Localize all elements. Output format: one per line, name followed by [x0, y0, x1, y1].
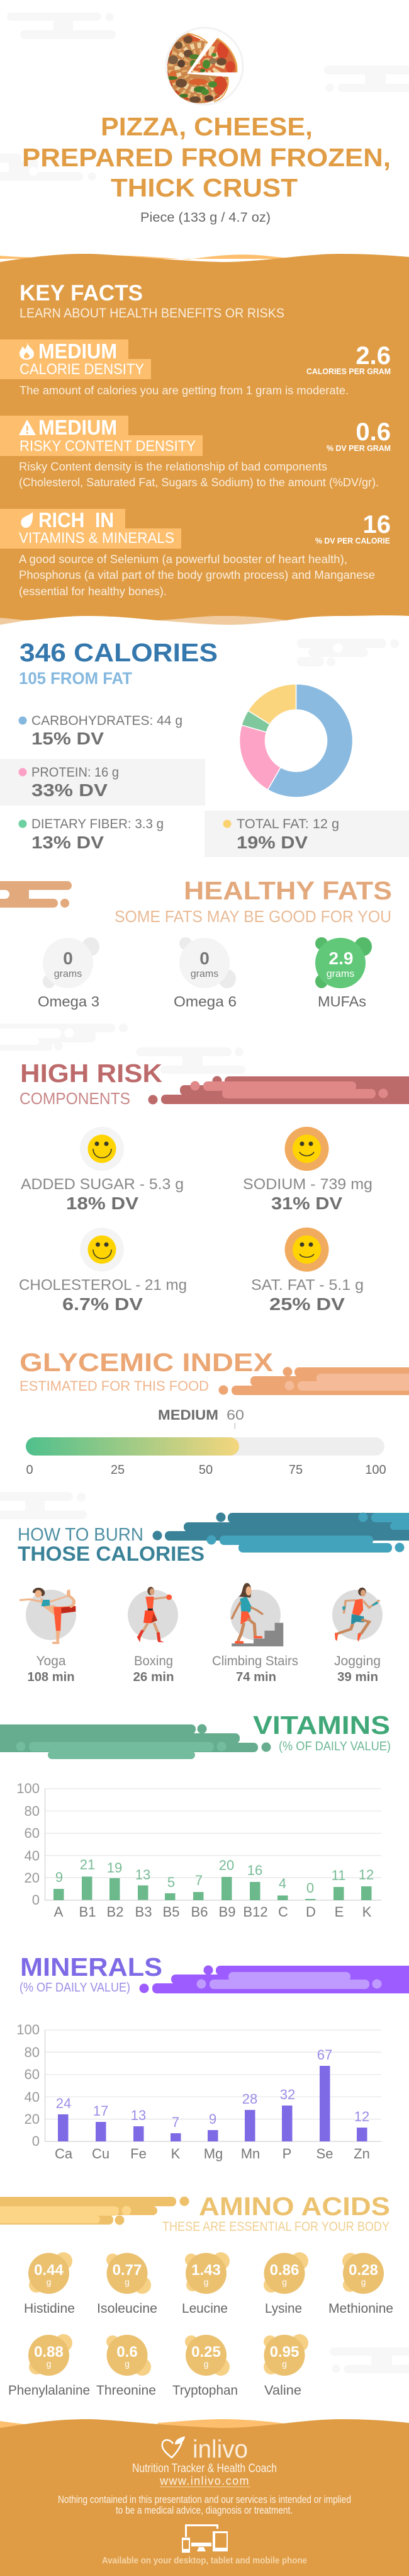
decorative header band — [0, 1724, 271, 1759]
amino: threonine: g — [125, 2359, 130, 2369]
availability note: Available on your desktop, tablet and mobile phone — [102, 2555, 307, 2566]
fact: risky content density: Risky Content density is the relationship of bad components — [19, 460, 327, 473]
decorative header band — [219, 1367, 409, 1395]
bar chart: minerals: Mg — [204, 2146, 223, 2162]
website link: www.inlivo.com — [159, 2475, 250, 2487]
bar chart: vitamins: B2 — [107, 1904, 123, 1920]
activity: jogging — [332, 1588, 383, 1684]
logo: inlivo: inlivo — [193, 2436, 248, 2463]
icon: devices — [182, 2524, 228, 2553]
amino: histidine: g — [47, 2277, 51, 2287]
amino: leucine: g — [204, 2277, 208, 2287]
item: saturated fat: SAT. FAT - 5.1 g — [251, 1277, 364, 1294]
amino: isoleucine — [97, 2253, 157, 2316]
activity: yoga: 108 min — [28, 1670, 74, 1684]
legend: total fat — [204, 811, 409, 857]
amino: leucine: Leucine — [182, 2301, 228, 2316]
vitamins heading: VITAMINS — [253, 1711, 390, 1740]
gauge scale: 100 — [365, 1463, 386, 1477]
tagline: Nutrition Tracker & Health Coach — [132, 2462, 277, 2475]
omega 3 bubble: grams — [54, 969, 82, 979]
bar chart: minerals: Zn — [354, 2146, 370, 2162]
legend: dietary fiber: 13% DV — [31, 833, 104, 852]
bar chart: vitamins: C — [278, 1904, 288, 1920]
bar chart: vitamins: 13 — [135, 1867, 150, 1883]
key facts heading: KEY FACTS — [20, 281, 143, 305]
legend: protein — [0, 759, 205, 806]
decorative header band — [152, 1513, 409, 1553]
fact: calorie density: CALORIES PER GRAM — [306, 367, 391, 376]
activity: boxing: Boxing — [134, 1654, 173, 1668]
bar chart: minerals: 12 — [354, 2109, 369, 2124]
bar chart: minerals: K — [171, 2146, 181, 2162]
amino: leucine: 1.43 — [191, 2262, 221, 2279]
bar chart: vitamins: B3 — [135, 1904, 152, 1920]
activity: jogging: Jogging — [334, 1654, 381, 1668]
fact: calorie density: 2.6 — [356, 342, 391, 370]
bar chart: vitamins: 12 — [359, 1867, 374, 1883]
legend: dietary fiber: DIETARY FIBER: 3.3 g — [31, 817, 164, 831]
calories heading: 346 CALORIES — [20, 638, 218, 667]
legend: carbohydrates: 15% DV — [31, 729, 104, 748]
amino acids heading: AMINO ACIDS — [199, 2192, 390, 2221]
fact: rich in vitamins and minerals: % DV PER CALORIE — [315, 536, 390, 545]
legend: dietary fiber — [19, 817, 164, 852]
item: cholesterol: CHOLESTEROL - 21 mg — [19, 1277, 187, 1294]
legend: protein: 33% DV — [31, 780, 108, 800]
amino: phenylalanine: 0.88 — [34, 2344, 64, 2361]
bar chart: vitamins: 60 — [25, 1825, 40, 1841]
fact: calorie density — [0, 339, 391, 397]
value label — [158, 1407, 244, 1429]
decorative header band — [0, 2197, 189, 2225]
healthy fats subheading: SOME FATS MAY BE GOOD FOR YOU — [115, 907, 391, 926]
omega 3 bubble: 0 — [63, 949, 73, 968]
bar chart: vitamins: 4 — [279, 1876, 286, 1891]
MUFAs bubble: grams — [327, 969, 354, 979]
activity: boxing — [128, 1587, 178, 1684]
bar chart: vitamins: 7 — [195, 1872, 203, 1888]
fact: calorie density: The amount of calories you are getting from 1 gram is moderate. — [20, 384, 349, 397]
activity: climbing stairs: 74 min — [236, 1670, 276, 1684]
amino: tryptophan: 0.25 — [191, 2344, 221, 2361]
glycemic index heading: GLYCEMIC INDEX — [20, 1348, 273, 1377]
amino: histidine: 0.44 — [34, 2262, 64, 2279]
bar chart: vitamins: E — [335, 1904, 344, 1920]
bar chart: minerals: Fe — [130, 2146, 147, 2162]
omega 6 bubble: grams — [191, 969, 218, 979]
gauge scale: 75 — [289, 1463, 303, 1477]
amino: phenylalanine: g — [47, 2359, 51, 2369]
bar chart: vitamins: D — [306, 1904, 316, 1920]
activity: boxing: 26 min — [133, 1670, 174, 1684]
amino: lysine: g — [282, 2277, 287, 2287]
omega 6 bubble — [174, 937, 237, 1010]
logo: inlivo — [162, 2436, 248, 2463]
fact: risky content density: RISKY CONTENT DENSITY — [20, 438, 196, 455]
fact: rich in vitamins and minerals — [0, 508, 391, 598]
title: PIZZA, CHEESE, — [101, 112, 313, 141]
amino: methionine: Methionine — [328, 2301, 393, 2316]
item: saturated fat — [251, 1228, 364, 1314]
gauge scale: 50 — [199, 1463, 213, 1477]
panel: footer — [0, 2419, 409, 2576]
bar chart: vitamins: B1 — [79, 1904, 96, 1920]
item: sodium — [243, 1127, 373, 1213]
bar chart: minerals: 9 — [209, 2111, 216, 2127]
fact: rich in vitamins and minerals: VITAMINS & MINERALS — [19, 530, 174, 547]
bar chart: minerals: P — [283, 2146, 291, 2162]
bar chart: minerals: Se — [317, 2146, 333, 2162]
burn subheading: THOSE CALORIES — [18, 1542, 204, 1565]
bar chart: minerals — [16, 2022, 381, 2162]
amino: lysine — [264, 2252, 308, 2316]
decorative header band — [148, 1076, 409, 1105]
key facts subheading: LEARN ABOUT HEALTH BENEFITS OR RISKS — [20, 306, 284, 321]
bar chart: vitamins: 40 — [25, 1848, 40, 1864]
amino: phenylalanine — [8, 2334, 90, 2398]
panel: amino acids — [0, 2192, 393, 2398]
item: added sugar: ADDED SUGAR - 5.3 g — [21, 1176, 184, 1193]
item: added sugar — [21, 1127, 184, 1213]
MUFAs bubble: MUFAs — [318, 993, 366, 1010]
amino: isoleucine: g — [125, 2277, 130, 2287]
bar chart: vitamins: B5 — [163, 1904, 179, 1920]
activity: climbing stairs — [212, 1583, 298, 1684]
bar chart: minerals: Ca — [55, 2146, 73, 2162]
item: cholesterol — [19, 1228, 187, 1314]
fact: rich in vitamins and minerals: RICH IN — [38, 508, 114, 532]
icon: flame — [20, 342, 34, 360]
panel: key facts — [0, 254, 409, 625]
item: added sugar: 18% DV — [66, 1194, 138, 1213]
amino: valine: Valine — [264, 2383, 301, 2398]
burn heading: HOW TO BURN — [18, 1525, 143, 1545]
omega 6 bubble: Omega 6 — [174, 993, 237, 1010]
panel: calories — [0, 638, 409, 857]
bar chart: minerals: 7 — [172, 2114, 179, 2130]
item: sodium: SODIUM - 739 mg — [243, 1176, 373, 1193]
high risk subheading: COMPONENTS — [20, 1089, 130, 1108]
bar chart: minerals: 40 — [25, 2089, 40, 2105]
bar chart: minerals: 0 — [32, 2133, 40, 2149]
bar chart: minerals: 100 — [16, 2022, 40, 2037]
panel: healthy fats — [0, 876, 392, 1010]
glycemic index subheading: ESTIMATED FOR THIS FOOD — [20, 1378, 209, 1394]
omega 3 bubble — [38, 937, 99, 1010]
MUFAs bubble: 2.9 — [329, 949, 353, 968]
activity: yoga: Yoga — [36, 1654, 66, 1668]
amino: isoleucine: 0.77 — [113, 2262, 142, 2279]
legend: total fat: TOTAL FAT: 12 g — [237, 817, 339, 831]
item: sodium: 31% DV — [271, 1194, 342, 1213]
bar chart: vitamins: B12 — [243, 1904, 268, 1920]
serving size: Piece (133 g / 4.7 oz) — [140, 210, 271, 225]
bar chart: minerals: Mn — [241, 2146, 260, 2162]
icon: pizza on a plate — [166, 28, 243, 105]
omega 6 bubble: 0 — [199, 949, 210, 968]
bar chart: vitamins: 9 — [55, 1869, 63, 1885]
amino: lysine: Lysine — [265, 2301, 302, 2316]
gauge bar — [26, 1437, 384, 1456]
calories from fat: 105 FROM FAT — [19, 669, 132, 688]
legend: carbohydrates — [19, 714, 182, 748]
omega 3 bubble: Omega 3 — [38, 993, 99, 1010]
bar chart: minerals: 20 — [25, 2111, 40, 2127]
activity: yoga — [20, 1588, 76, 1684]
fact: risky content density: (Cholesterol, Saturated Fat, Sugars & Sodium) to the amount (%DV/gr). — [19, 476, 379, 489]
fact: rich in vitamins and minerals: 16 — [362, 511, 391, 539]
amino: leucine — [182, 2252, 230, 2316]
bar chart: vitamins: A — [54, 1904, 64, 1920]
amino: methionine — [328, 2253, 393, 2316]
disclaimer: to be a medical advice, diagnosis or treatment. — [116, 2504, 293, 2516]
amino: methionine: g — [361, 2277, 366, 2287]
bar chart: minerals: 80 — [25, 2044, 40, 2060]
fact: risky content density: MEDIUM — [38, 416, 117, 439]
fact: risky content density — [0, 416, 391, 489]
item: saturated fat: 25% DV — [269, 1294, 345, 1314]
amino: tryptophan: g — [204, 2359, 208, 2369]
bar chart: vitamins: K — [362, 1904, 372, 1920]
MUFAs bubble — [315, 937, 372, 1010]
bar chart: vitamins — [16, 1781, 381, 1920]
bar chart: vitamins: 19 — [107, 1860, 122, 1876]
fact: rich in vitamins and minerals: Phosphorus (a vital part of the body growth process) and Manganese — [19, 569, 375, 581]
title: PREPARED FROM FROZEN, — [22, 143, 391, 172]
bar chart: vitamins: 80 — [25, 1803, 40, 1819]
amino: histidine — [24, 2252, 75, 2316]
bar chart: vitamins: 5 — [167, 1874, 175, 1890]
amino: tryptophan — [172, 2335, 238, 2398]
bar chart: vitamins: 20 — [25, 1870, 40, 1886]
decorative header band — [0, 881, 72, 908]
bar chart: vitamins: 21 — [80, 1857, 95, 1872]
amino: threonine — [96, 2335, 156, 2398]
fact: risky content density: % DV PER GRAM — [327, 443, 391, 453]
bar chart: minerals: 32 — [280, 2087, 295, 2102]
activity: jogging: 39 min — [337, 1670, 378, 1684]
bar chart: minerals: 13 — [131, 2107, 146, 2123]
amino: phenylalanine: Phenylalanine — [8, 2383, 90, 2398]
gauge scale: 25 — [111, 1463, 125, 1477]
vitamins subheading: (% OF DAILY VALUE) — [279, 1740, 391, 1753]
legend: carbohydrates: CARBOHYDRATES: 44 g — [31, 714, 182, 728]
activity: climbing stairs: Climbing Stairs — [212, 1654, 298, 1668]
amino: threonine: Threonine — [96, 2383, 156, 2398]
legend: protein: PROTEIN: 16 g — [31, 765, 119, 780]
amino: valine: 0.95 — [270, 2344, 299, 2361]
title: THICK CRUST — [111, 173, 298, 202]
panel: how to burn those calories — [18, 1513, 409, 1684]
panel: vitamins — [0, 1711, 391, 1920]
fact: rich in vitamins and minerals: A good source of Selenium (a powerful booster of heart health), — [19, 553, 347, 566]
high risk heading: HIGH RISK — [20, 1059, 162, 1088]
fact: calorie density: MEDIUM — [38, 339, 117, 363]
amino: threonine: 0.6 — [116, 2344, 138, 2361]
healthy fats heading: HEALTHY FATS — [184, 876, 392, 905]
panel: glycemic index — [20, 1348, 409, 1477]
amino: valine: g — [282, 2359, 287, 2369]
bar chart: vitamins: 0 — [306, 1880, 314, 1896]
title — [22, 112, 391, 202]
amino: tryptophan: Tryptophan — [172, 2383, 238, 2398]
bar chart: minerals: 24 — [56, 2095, 71, 2111]
fact: risky content density: 0.6 — [356, 418, 391, 446]
icon: warning triangle — [19, 419, 36, 435]
decorative header band — [140, 1965, 409, 1993]
amino: lysine: 0.86 — [270, 2262, 299, 2279]
bar chart: vitamins: 0 — [32, 1892, 40, 1908]
amino: isoleucine: Isoleucine — [97, 2301, 157, 2316]
bar chart: vitamins: 20 — [219, 1857, 234, 1873]
legend: total fat: 19% DV — [237, 833, 308, 852]
amino: histidine: Histidine — [24, 2301, 75, 2316]
bar chart: vitamins: 100 — [16, 1781, 40, 1796]
panel: minerals — [16, 1952, 409, 2162]
white cut-outs in the clouds — [0, 167, 342, 1045]
panel: high risk components — [19, 1059, 409, 1314]
icon: leaf — [21, 512, 33, 528]
bar chart: vitamins: B9 — [219, 1904, 235, 1920]
bar chart: vitamins: B6 — [191, 1904, 208, 1920]
amino: valine — [264, 2334, 308, 2398]
fact: rich in vitamins and minerals: (essential for healthy bones). — [19, 585, 167, 598]
bar chart: minerals: 28 — [242, 2091, 257, 2107]
bar chart: minerals: 60 — [25, 2066, 40, 2082]
value label: MEDIUM — [158, 1407, 218, 1423]
amino: methionine: 0.28 — [349, 2262, 378, 2279]
bar chart: vitamins: 11 — [332, 1867, 345, 1883]
bar chart: vitamins: 16 — [247, 1862, 262, 1878]
disclaimer — [58, 2493, 351, 2516]
value label: 60 — [227, 1407, 244, 1423]
minerals heading: MINERALS — [20, 1952, 162, 1981]
bar chart: minerals: 67 — [317, 2047, 332, 2063]
item: cholesterol: 6.7% DV — [62, 1294, 143, 1314]
donut chart — [240, 684, 353, 797]
gauge scale — [26, 1463, 386, 1477]
bar chart: minerals: Cu — [92, 2146, 109, 2162]
gauge scale: 0 — [26, 1463, 33, 1477]
bar chart: minerals: 17 — [93, 2103, 108, 2119]
minerals subheading: (% OF DAILY VALUE) — [20, 1981, 130, 1995]
fact: calorie density: CALORIE DENSITY — [20, 361, 144, 378]
